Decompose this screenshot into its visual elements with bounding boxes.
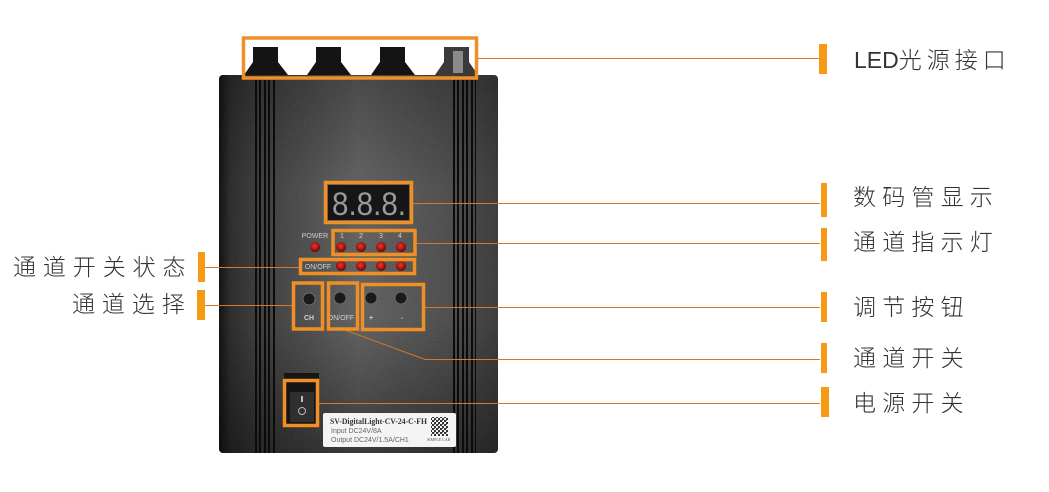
panel labels and LEDs: - — [401, 315, 404, 322]
callout: 数码管显示 — [821, 183, 999, 217]
panel labels and LEDs: 1 — [340, 233, 344, 240]
product label — [323, 413, 456, 447]
callout: 数码管显示: 数码管显示 — [853, 184, 999, 210]
panel labels and LEDs — [302, 233, 406, 322]
product label: SIMPLE LAB — [427, 437, 451, 442]
device body — [219, 75, 498, 453]
leader lines — [205, 58, 820, 404]
panel labels and LEDs: 3 — [379, 233, 383, 240]
callout: 电源开关: 电源开关 — [853, 390, 970, 416]
callout: 通道选择: 通道选择 — [72, 291, 192, 317]
product label: SV-DigitalLight-CV-24-C-FH — [330, 417, 428, 426]
product label: Output DC24V/1.5A/CH1 — [331, 437, 409, 444]
panel labels and LEDs: POWER — [302, 233, 328, 240]
panel labels and LEDs: ON/OFF — [305, 264, 331, 271]
callout: 通道指示灯 — [821, 228, 999, 261]
LED connectors — [244, 47, 478, 75]
callout: 调节按钮 — [821, 292, 970, 322]
panel labels and LEDs: 4 — [398, 233, 402, 240]
callout: 电源开关 — [821, 387, 970, 417]
left grooves — [255, 80, 476, 453]
orange highlight boxes — [244, 38, 476, 426]
callout: 通道开关 — [821, 343, 970, 373]
callout: 通道开关状态: 通道开关状态 — [13, 254, 192, 280]
power rocker switch — [284, 373, 319, 427]
push buttons — [303, 292, 407, 305]
callout: 通道开关: 通道开关 — [853, 345, 970, 371]
panel labels and LEDs: 2 — [359, 233, 363, 240]
panel labels and LEDs: CH — [304, 315, 314, 322]
product label: Input DC24V/8A — [331, 428, 382, 435]
seven segment display: 8.8.8. — [332, 186, 406, 222]
panel labels and LEDs: + — [369, 315, 373, 322]
callout: 通道指示灯: 通道指示灯 — [853, 229, 999, 255]
callout: 调节按钮: 调节按钮 — [853, 294, 970, 320]
callout: LED光源接口: LED光源接口 — [854, 47, 1011, 73]
panel labels and LEDs: ON/OFF — [328, 315, 354, 322]
